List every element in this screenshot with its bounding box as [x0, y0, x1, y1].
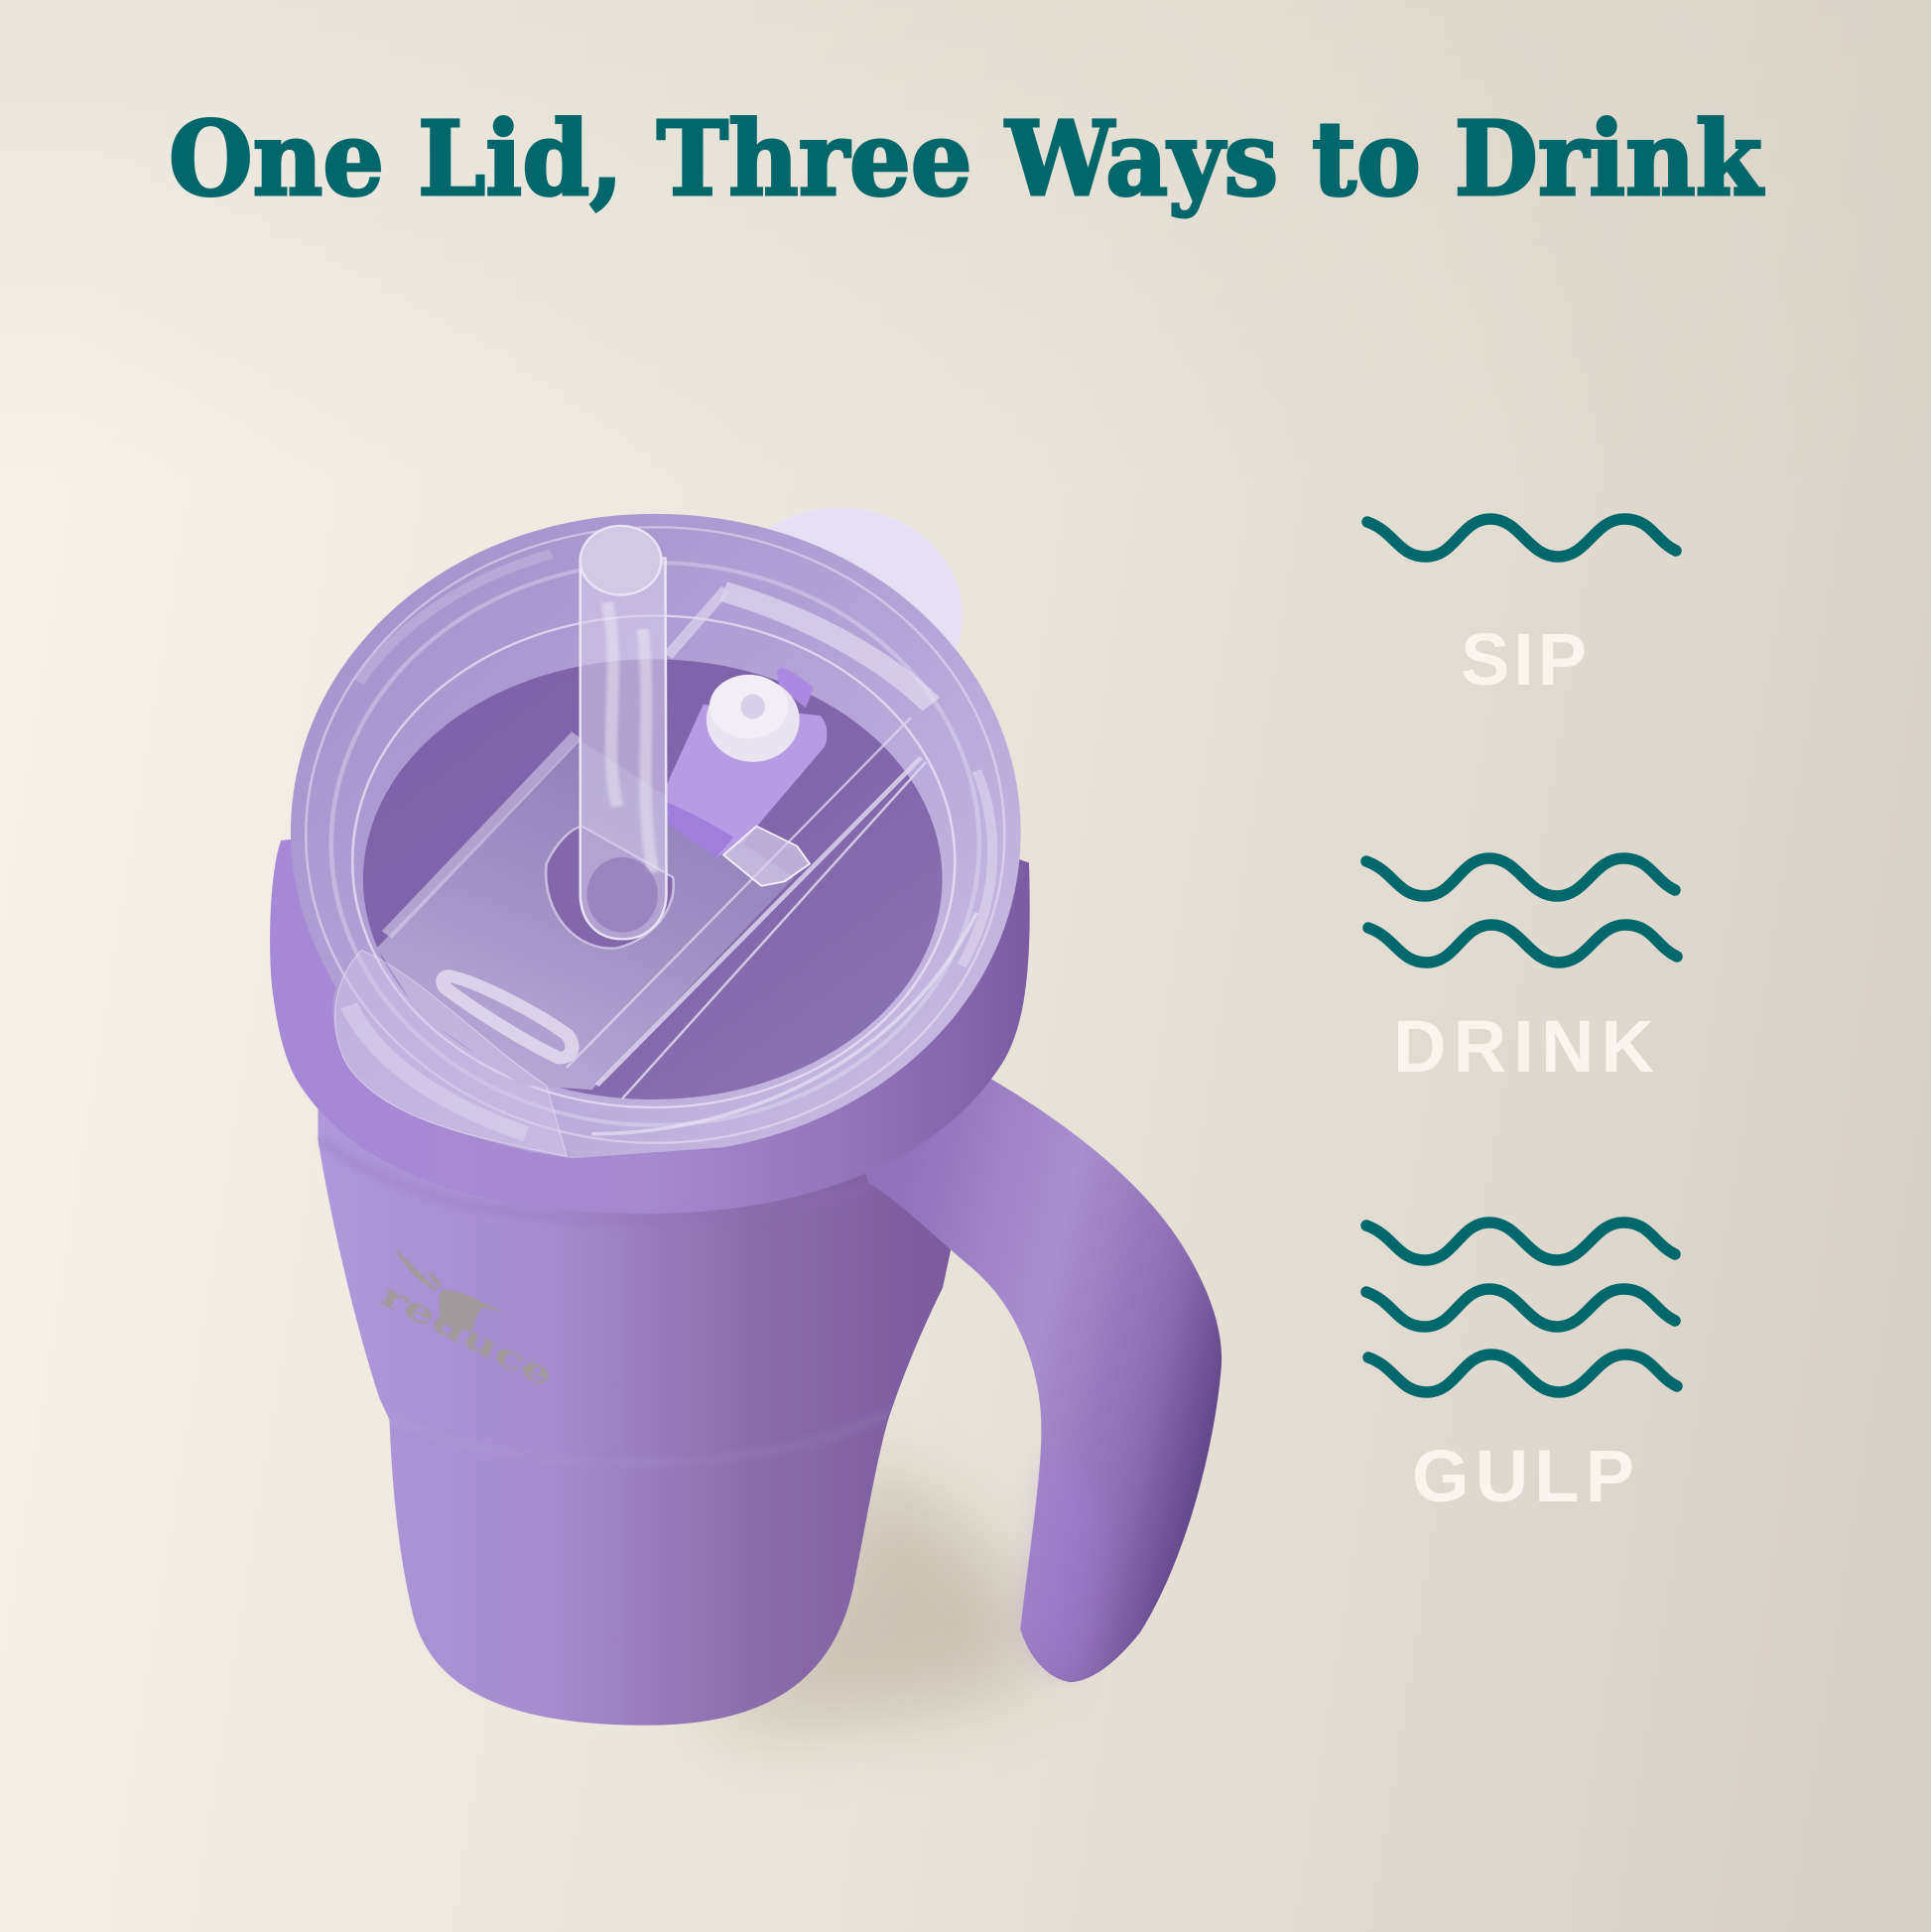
- pull tab: [717, 508, 963, 722]
- rim highlights: [306, 527, 1004, 1143]
- collar shadow crease: [321, 1140, 918, 1220]
- front lip: [335, 951, 567, 1156]
- lid: [291, 508, 1021, 1158]
- channel edge bars: [387, 589, 926, 1098]
- plug base: [665, 705, 827, 857]
- lid floor: [363, 659, 943, 1099]
- sip wave: [1367, 519, 1676, 557]
- tumbler: [270, 508, 1222, 1732]
- straw lower refraction: [586, 857, 658, 933]
- ground shadow: [690, 1454, 1039, 1732]
- title: One Lid, Three Ways to Drink: [169, 99, 1764, 219]
- straw tube: [580, 558, 667, 939]
- drinking options: [1366, 519, 1677, 1392]
- logo wordmark: reduce: [374, 1275, 560, 1394]
- label: drink: DRINK: [1393, 1005, 1654, 1088]
- label: gulp: GULP: [1412, 1435, 1634, 1517]
- straw reflection: [607, 602, 653, 872]
- handle lower glow: [1025, 1454, 1103, 1674]
- lid shell: [291, 514, 1021, 1158]
- straw opening: [546, 827, 674, 949]
- label: sip: SIP: [1461, 618, 1587, 701]
- slider clip: [723, 827, 810, 886]
- logo: [374, 1247, 560, 1394]
- stopper hole: [741, 695, 765, 719]
- handle: [862, 1076, 1222, 1682]
- gasket: [444, 975, 572, 1058]
- straw: [580, 526, 667, 939]
- silicone plug: [665, 668, 827, 857]
- plug tab: [777, 668, 814, 708]
- stopper: [707, 678, 800, 762]
- collar: [270, 801, 1030, 1214]
- drink waves: [1366, 858, 1677, 963]
- gulp waves: [1366, 1223, 1677, 1392]
- body step shading: [389, 1412, 890, 1463]
- logo mark: [395, 1247, 503, 1330]
- stopper top: [709, 675, 788, 738]
- plug side face: [666, 802, 733, 857]
- slider channel: [377, 740, 795, 1090]
- straw top: [580, 526, 661, 595]
- tumbler body: [270, 801, 1222, 1726]
